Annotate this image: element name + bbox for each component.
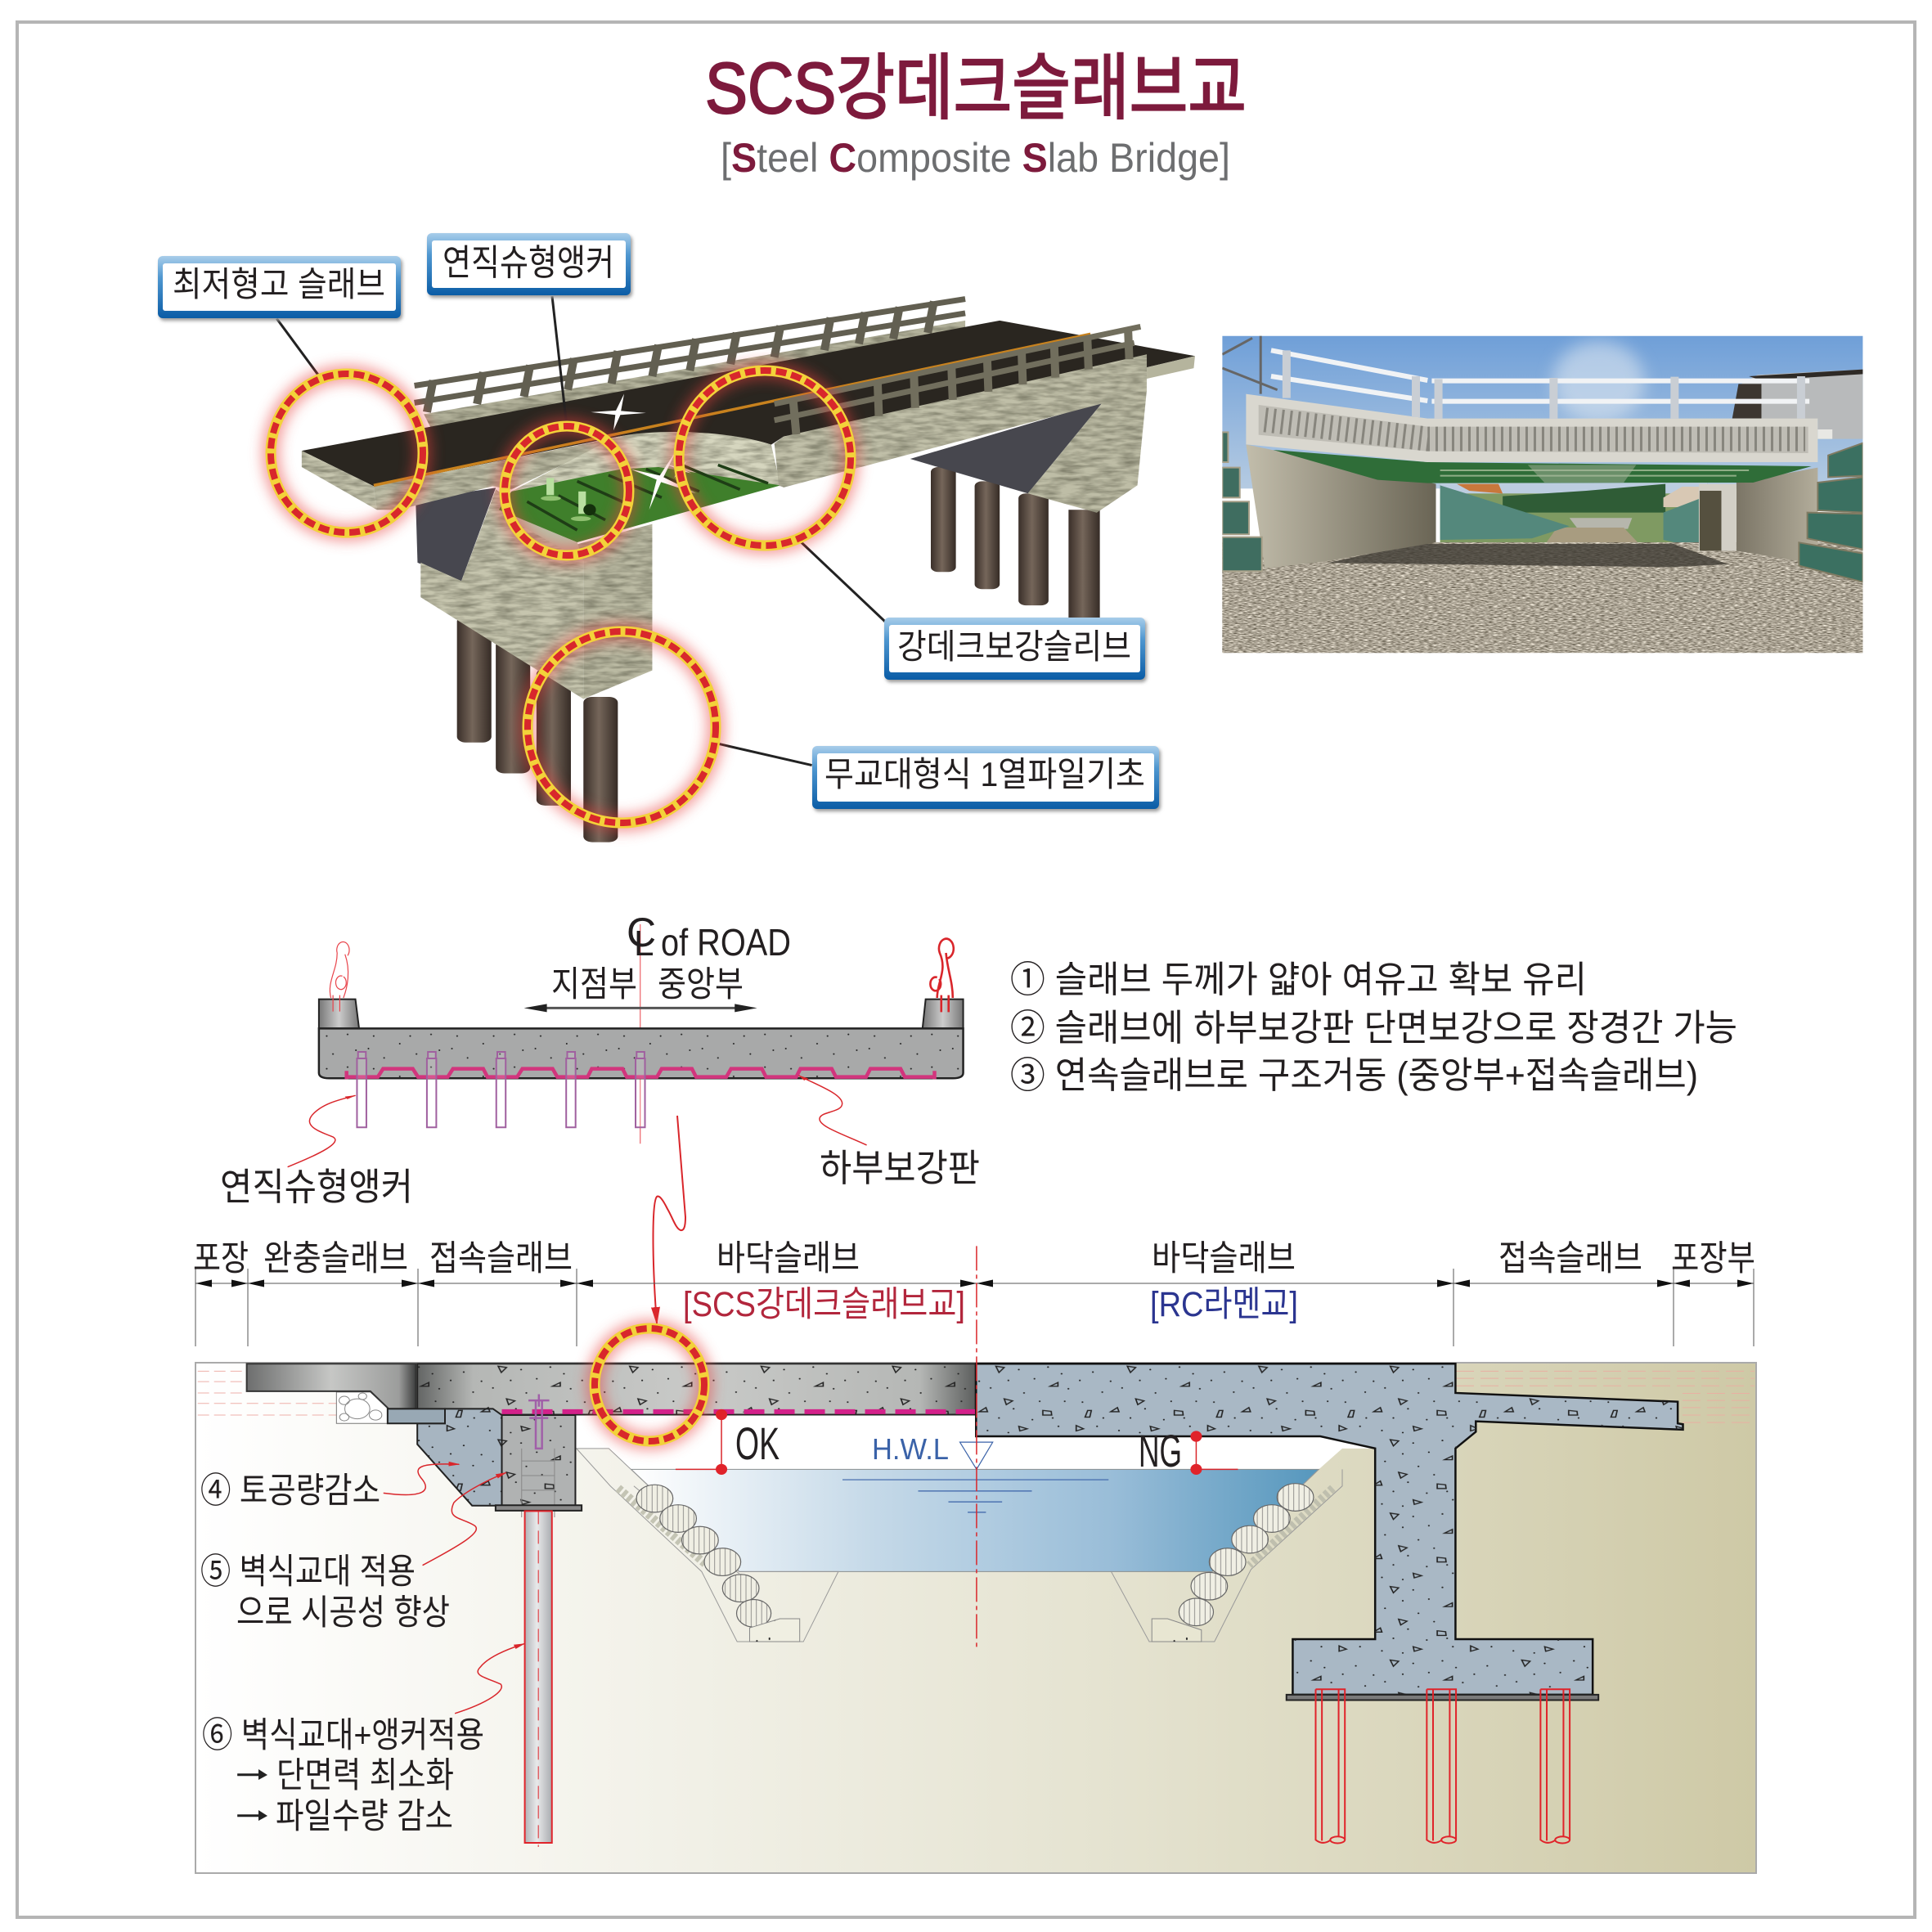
feature list: [1010, 959, 1737, 1096]
dimension label: 포장부: 포장부: [1671, 1239, 1755, 1278]
photo: gabions centre: [1440, 485, 1699, 548]
far railing: [415, 299, 965, 412]
dimension label: 바닥슬래브 left: 바닥슬래브: [717, 1239, 860, 1278]
photo: ground gravel: [1222, 542, 1862, 653]
deck right tip: [1147, 356, 1195, 379]
rubble under approach: [336, 1392, 389, 1423]
piles: right abutment: [931, 467, 1100, 620]
photo: gabions right: [1799, 443, 1862, 582]
feature list: ① 슬래브 두께가 얇아 여유고 확보 유리: [1010, 959, 1587, 1000]
SCS deck slab: [417, 1364, 976, 1414]
callout: 무교대형식 1열파일기초: 무교대형식 1열파일기초: [824, 755, 1145, 793]
callout: 최저형고 슬래브: [158, 256, 402, 321]
shoe anchor: [528, 1394, 550, 1449]
note 4: ④ 토공량감소: [200, 1471, 380, 1511]
dimension label: 바닥슬래브 right: 바닥슬래브: [1152, 1239, 1296, 1278]
photo: green steel soffit: [1274, 450, 1812, 483]
water: [631, 1469, 1319, 1571]
hatch: left pavement: [198, 1371, 336, 1415]
deck edge: front and end faces: [302, 437, 621, 510]
hatch: right pavement: [1456, 1371, 1755, 1422]
footing plate: [1287, 1695, 1598, 1700]
right riprap: [1179, 1484, 1314, 1626]
photo: railings: [1271, 350, 1809, 419]
dimension label: RC: [RC라멘교]: [1150, 1285, 1298, 1324]
photo: sky: [1222, 336, 1862, 488]
water lines: [842, 1480, 1108, 1512]
label: vertical anchor: 연직슈형앵커: [220, 1166, 413, 1208]
3D bridge illustration: [302, 299, 1195, 842]
CL symbol: C: [627, 910, 656, 955]
note 6: [202, 1716, 484, 1836]
photo: left wall: [1246, 444, 1436, 568]
anchors: [357, 1052, 645, 1127]
note 5: ⑤ 벽식교대 적용: [200, 1552, 416, 1592]
highlight circle: anchor: [505, 426, 629, 555]
centre line: [640, 924, 641, 1143]
feature list: ③ 연속슬래브로 구조거동 (중앙부+접속슬래브): [1010, 1054, 1698, 1096]
sparkles: [591, 393, 696, 510]
slab: [319, 1028, 964, 1078]
dimension label: 접속슬래브 right: 접속슬래브: [1498, 1239, 1642, 1278]
photo: right wall and pier: [1699, 468, 1817, 564]
note 6: 파일수량 감소: [276, 1797, 453, 1836]
centre line: [374, 334, 1090, 485]
left channel foundation: [577, 1449, 838, 1642]
highlight circle: slab: [271, 374, 423, 532]
piles: left abutment: [457, 616, 618, 842]
steel deck plate: [347, 1069, 934, 1079]
left parapet: [319, 1000, 359, 1028]
right foot block: [1152, 1619, 1202, 1642]
callout: 강데크보강슬리브: 강데크보강슬리브: [897, 627, 1131, 666]
wall abutment: [502, 1415, 575, 1517]
highlight circle: section slab: [595, 1328, 704, 1441]
NG label: NG: [1139, 1425, 1182, 1476]
person right: [930, 939, 954, 1012]
right channel foundation: [1111, 1469, 1342, 1642]
leader 6: [455, 1644, 524, 1714]
OK label: OK: [735, 1418, 780, 1469]
left foot block: [749, 1619, 800, 1642]
approach seat: [388, 1409, 445, 1423]
title: SCS강데크슬래브교: [705, 47, 1247, 128]
photo: building: [1732, 370, 1862, 439]
near railing: [775, 326, 1140, 434]
section centre line: [976, 1246, 977, 1650]
leader 5: [423, 1472, 506, 1566]
OK clearance marker: [676, 1409, 727, 1475]
long leader to section: [653, 1116, 685, 1323]
dimension label: 포장: 포장: [193, 1239, 249, 1278]
span arrow: [543, 1007, 739, 1009]
highlight circle: deck sleeve: [679, 371, 851, 546]
left rubble band: [618, 1488, 707, 1566]
near parapet: [775, 354, 1147, 487]
deck surface: asphalt: [302, 321, 1195, 486]
note 6: 단면력 최소화: [276, 1756, 454, 1795]
photo: gabions left: [1222, 432, 1262, 571]
leader 4: [384, 1464, 459, 1494]
subtitle: [Steel Composite Slab Bridge]: [721, 135, 1230, 181]
longitudinal section drawing: [198, 1246, 1755, 1847]
photo: utility pole: [1222, 336, 1278, 394]
photo: view through opening: [1440, 483, 1708, 542]
right rubble band: [1249, 1488, 1333, 1566]
steel deck (green): [499, 465, 780, 560]
dimension label: SCS: [SCS강데크슬래브교]: [683, 1285, 965, 1324]
frame piles: [1315, 1689, 1570, 1843]
far parapet: [424, 321, 965, 433]
NG clearance marker: [1190, 1431, 1238, 1475]
anchors: [541, 478, 596, 521]
abutment pile: [525, 1511, 552, 1847]
support label: 지점부: [551, 965, 637, 1004]
callout: 최저형고 슬래브: 최저형고 슬래브: [173, 265, 385, 303]
note 5: [200, 1552, 450, 1633]
cutaway concrete: [511, 432, 780, 492]
note 5: 으로 시공성 향상: [236, 1593, 450, 1633]
HWL label: H.W.L: [872, 1432, 949, 1466]
photo: bridge fascia: [1246, 394, 1832, 462]
arrowheads beside bullets: [258, 1769, 267, 1821]
midspan label: 중앙부: [658, 965, 744, 1004]
arrows beside bullets: [237, 1775, 261, 1816]
longitudinal section panel: [195, 1363, 1756, 1873]
CL symbol: L: [634, 923, 654, 964]
feature list: ② 슬래브에 하부보강판 단면보강으로 장경간 가능: [1010, 1007, 1737, 1049]
dimension label: 접속슬래브 left: 접속슬래브: [429, 1239, 573, 1278]
clearance opening: [575, 1415, 1375, 1469]
road label: of ROAD: [661, 921, 791, 964]
cross-section: slab over steel deck: [319, 924, 964, 1143]
callout: 강데크보강슬리브: [884, 618, 1147, 682]
dimension line: [195, 1269, 1754, 1346]
photo of completed bridge: [1222, 336, 1862, 653]
right parapet: [923, 1000, 964, 1028]
leader lines: [276, 296, 885, 766]
approach buffer slab: [247, 1364, 416, 1409]
deck plate dashed line: [502, 1409, 976, 1414]
highlight circle: pile foundation: [528, 631, 716, 823]
dimension label: 완충슬래브: 완충슬래브: [263, 1239, 408, 1278]
leader: vertical anchor: [288, 1095, 356, 1167]
leader: lower plate: [799, 1076, 867, 1145]
abutment base plate: [496, 1505, 582, 1511]
left abutment: [416, 487, 652, 699]
label: lower plate: 하부보강판: [820, 1147, 980, 1189]
callout: 무교대형식 1열파일기초: [812, 746, 1161, 811]
left riprap: [636, 1485, 771, 1627]
callout: 연직슈형앵커: [427, 233, 632, 298]
note 6: ⑥ 벽식교대+앵커적용: [202, 1716, 484, 1755]
callout: 연직슈형앵커: 연직슈형앵커: [443, 243, 614, 283]
RC rigid frame: [976, 1364, 1683, 1843]
wedge backfill concrete: [417, 1409, 502, 1506]
person left: [330, 941, 349, 1012]
HWL triangle: [960, 1442, 993, 1469]
photo: shadow on ground: [1328, 544, 1728, 567]
right abutment: [910, 389, 1147, 513]
